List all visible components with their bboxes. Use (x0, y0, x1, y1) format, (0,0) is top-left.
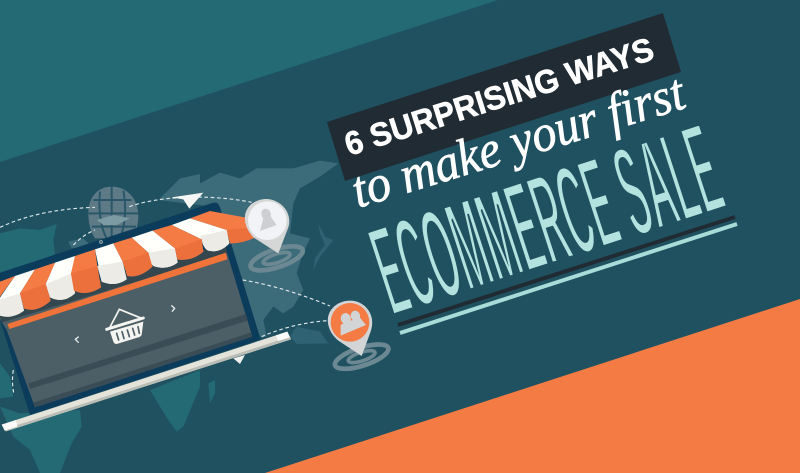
camera (99, 240, 103, 244)
top teal band (0, 0, 498, 162)
awning stripes orange (153, 225, 203, 260)
icon: shopping basket (107, 309, 143, 344)
pin: white person (245, 199, 305, 275)
illustration (0, 161, 391, 473)
title banner (327, 13, 681, 181)
bottom orange band (265, 299, 800, 473)
underline dark (398, 217, 735, 325)
map: islands (290, 223, 333, 344)
dashed flight paths (0, 197, 330, 395)
store awning (0, 211, 255, 317)
laptop base (2, 332, 291, 431)
chevron right (171, 305, 175, 312)
laptop frame (0, 203, 261, 415)
paper plane top (172, 193, 203, 209)
world map (0, 161, 338, 473)
base highlights (2, 420, 17, 431)
heading: ecommerce sale: ECOMMERCE SALE (355, 95, 737, 344)
pin body (245, 199, 289, 253)
ripple (248, 241, 305, 275)
awning stripes white (172, 218, 229, 251)
map: Africa (150, 370, 215, 432)
screen top shade (0, 243, 227, 323)
paper plane bottom (233, 355, 245, 364)
orange screen strip (7, 253, 227, 329)
group icon (341, 311, 366, 336)
underline light (400, 224, 737, 333)
pin body (328, 301, 372, 356)
screen stripes (28, 314, 248, 389)
chevron left (75, 337, 79, 343)
laptop screen (0, 252, 252, 407)
subtitle: to make your first: to make your first (345, 64, 693, 219)
banner background (327, 13, 681, 181)
pin: orange group (328, 301, 391, 374)
person icon (260, 209, 277, 231)
laptop (0, 203, 291, 431)
globe icon (88, 187, 138, 238)
map: Americas (0, 224, 82, 473)
heading: 6 surprising ways: 6 SURPRISING WAYS (340, 30, 658, 163)
ripple (332, 339, 391, 374)
map: Asia (68, 161, 338, 337)
awning right flap (190, 211, 255, 243)
